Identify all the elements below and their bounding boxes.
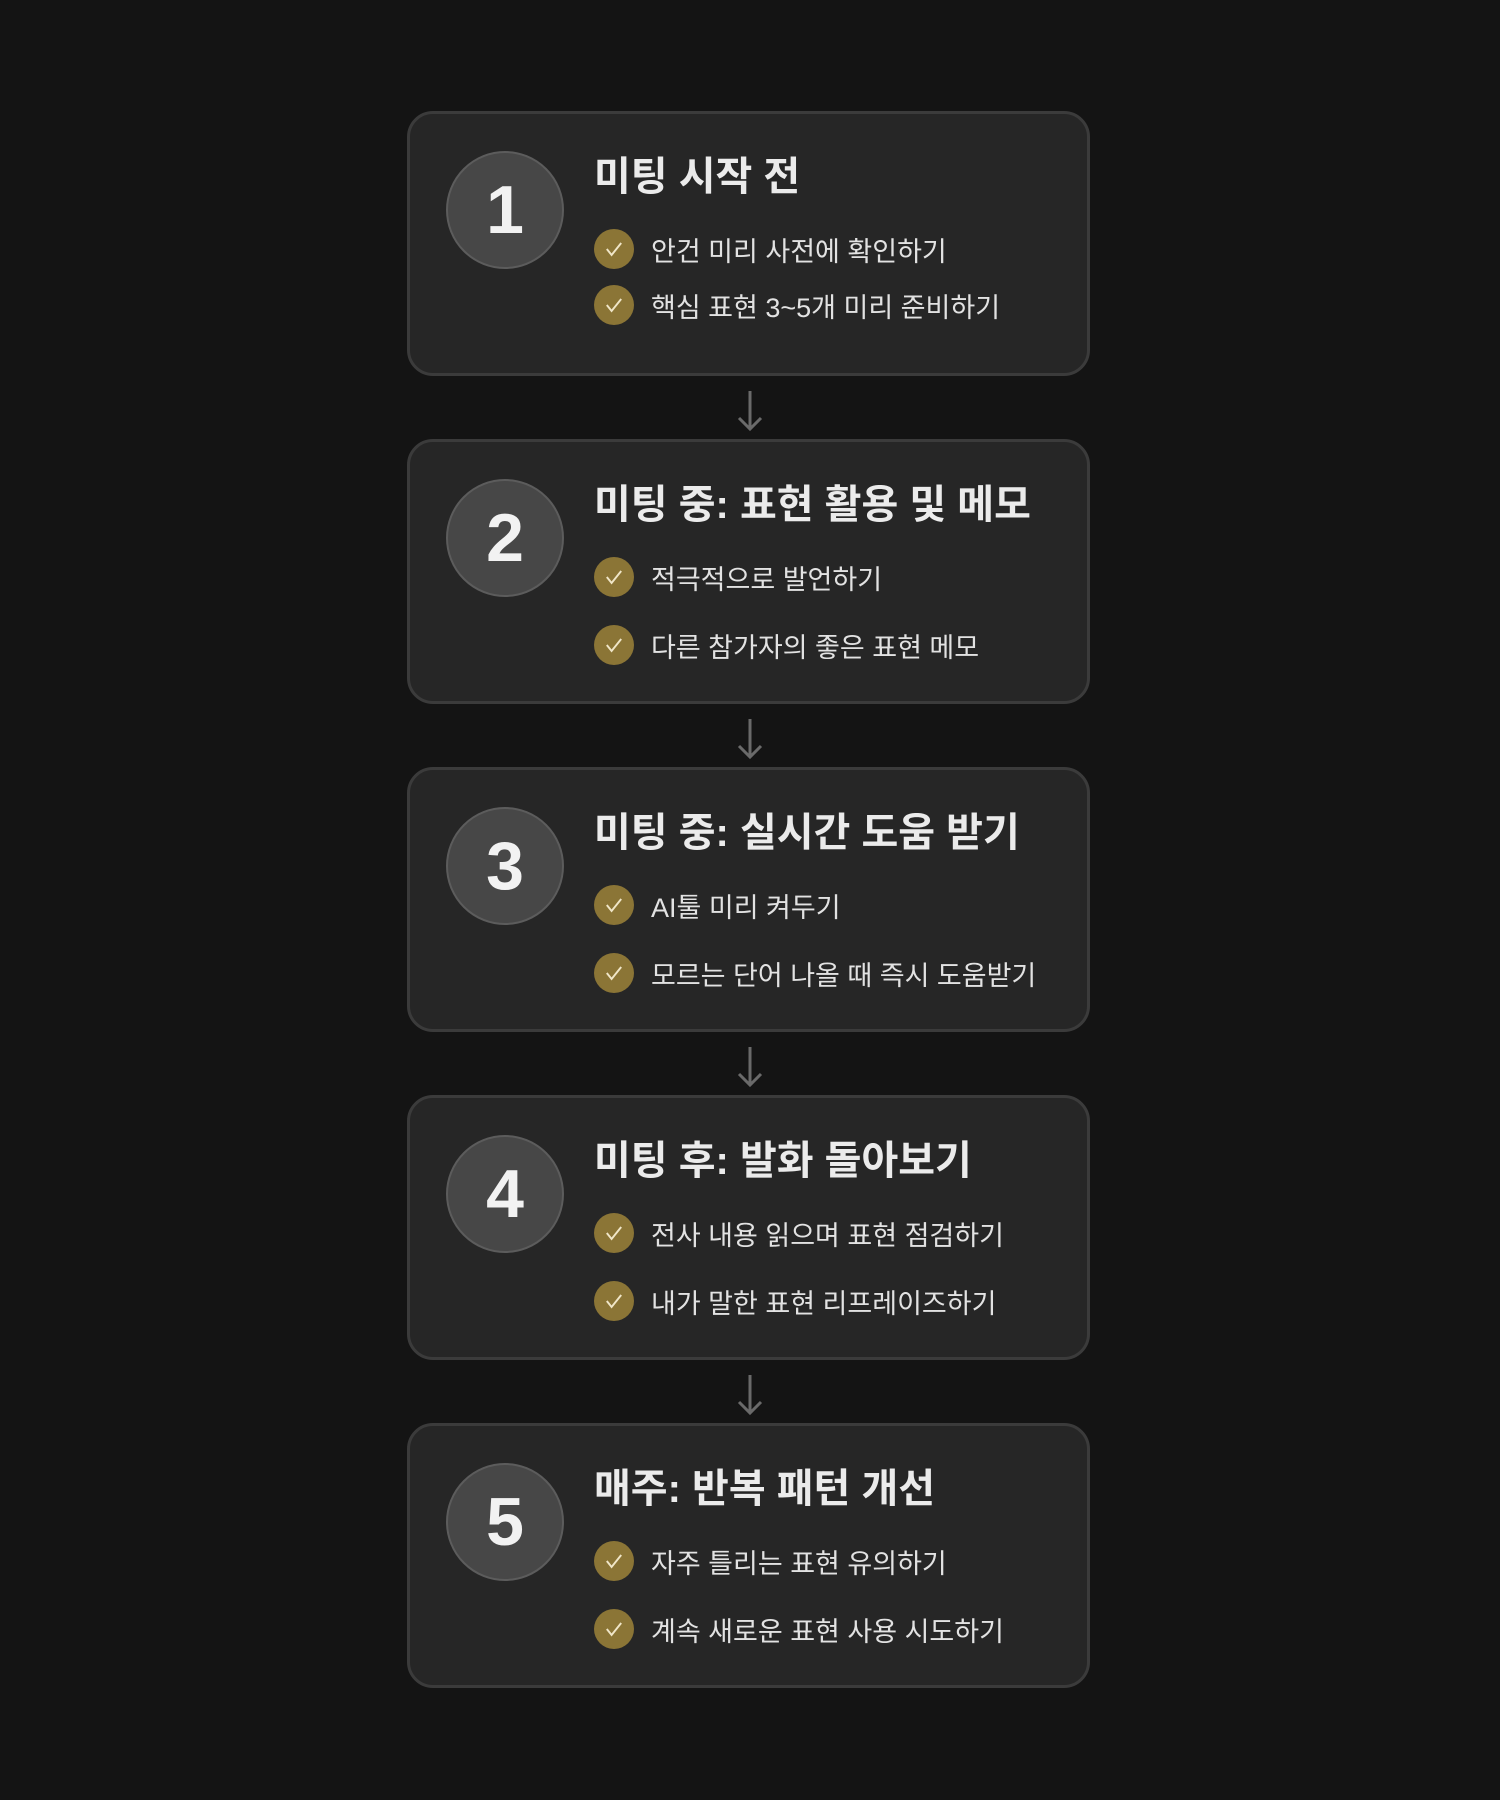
item 5-2: 계속 새로운 표현 사용 시도하기 (651, 1616, 1004, 1646)
icon: number 4: 4 (486, 1156, 524, 1232)
panel: step 5 (407, 1423, 1090, 1688)
icon: number 1 (446, 151, 564, 269)
heading: step 5: 매주: 반복 패턴 개선 (594, 1467, 935, 1511)
panel: step 2 (407, 439, 1090, 704)
item 4-2: 내가 말한 표현 리프레이즈하기 (651, 1288, 996, 1318)
item 1-2: 핵심 표현 3~5개 미리 준비하기 (651, 292, 1000, 322)
item 4-1 (594, 1213, 1004, 1253)
icon: number 4 (446, 1135, 564, 1253)
heading: step 1: 미팅 시작 전 (594, 155, 800, 199)
heading: step 4: 미팅 후: 발화 돌아보기 (594, 1139, 972, 1183)
arrow 4 (738, 1375, 762, 1415)
item 2-1: 적극적으로 발언하기 (651, 564, 882, 594)
icon: number 1: 1 (486, 172, 524, 248)
icon: number 2: 2 (486, 500, 524, 576)
item 5-1 (594, 1541, 947, 1581)
item 5-2 (594, 1609, 1004, 1649)
panel: step 4 (407, 1095, 1090, 1360)
icon: number 5 (446, 1463, 564, 1581)
arrow 3 (738, 1047, 762, 1087)
icon: number 2 (446, 479, 564, 597)
item 2-2: 다른 참가자의 좋은 표현 메모 (651, 632, 979, 662)
item 3-1 (594, 885, 841, 925)
item 5-1: 자주 틀리는 표현 유의하기 (651, 1548, 947, 1578)
arrow 2 (738, 719, 762, 759)
icon: number 3 (446, 807, 564, 925)
item 2-1 (594, 557, 882, 597)
item 2-2 (594, 625, 979, 665)
item 4-1: 전사 내용 읽으며 표현 점검하기 (651, 1220, 1004, 1250)
heading: step 3: 미팅 중: 실시간 도움 받기 (594, 811, 1020, 855)
item 1-1 (594, 229, 947, 269)
panel: step 3 (407, 767, 1090, 1032)
item 1-1: 안건 미리 사전에 확인하기 (651, 236, 947, 266)
item 3-2 (594, 953, 1036, 993)
item 1-2 (594, 285, 1000, 325)
item 3-1: AI툴 미리 켜두기 (651, 892, 841, 922)
item 4-2 (594, 1281, 996, 1321)
item 3-2: 모르는 단어 나올 때 즉시 도움받기 (651, 960, 1036, 990)
icon: number 3: 3 (486, 828, 524, 904)
arrow 1 (738, 391, 762, 431)
icon: number 5: 5 (486, 1484, 524, 1560)
panel: step 1 (407, 111, 1090, 376)
heading: step 2: 미팅 중: 표현 활용 및 메모 (594, 483, 1031, 527)
